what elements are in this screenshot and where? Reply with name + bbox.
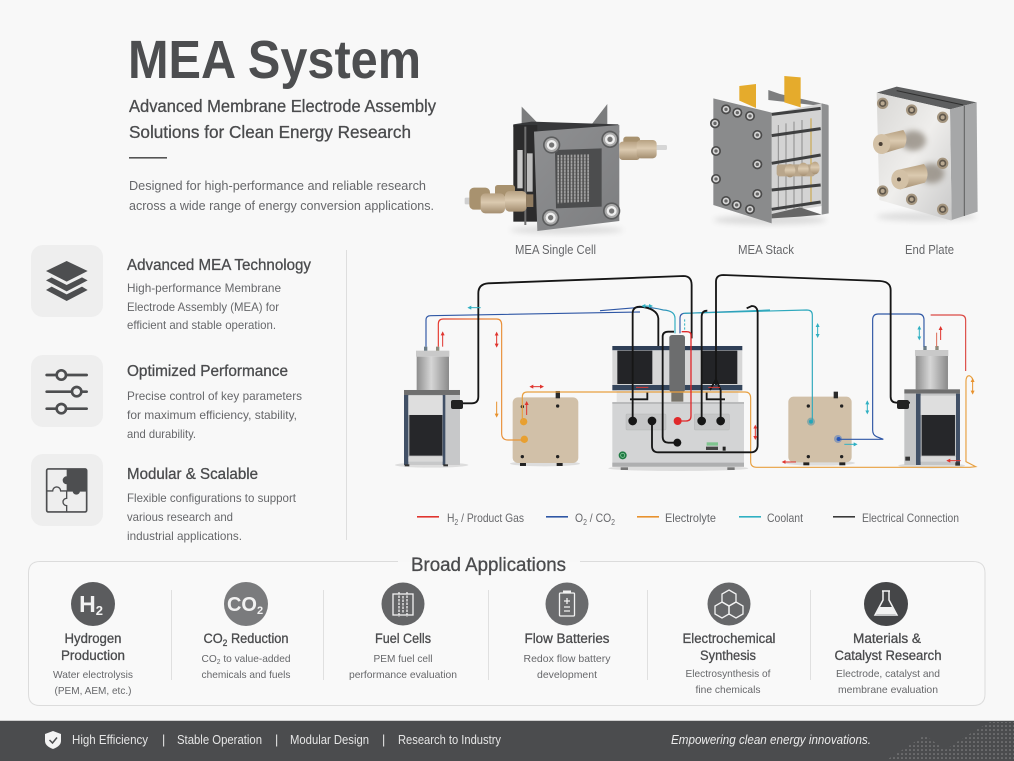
application: hydrogen production bbox=[53, 582, 133, 697]
application: CO2 reduction bbox=[202, 582, 291, 681]
feature: Optimized Performance: for maximum efficiency, stability, bbox=[127, 408, 297, 422]
label: End Plate: End Plate bbox=[905, 243, 954, 257]
title: MEA System bbox=[128, 30, 421, 90]
gas piping bbox=[426, 307, 966, 439]
legend: 2 bbox=[454, 518, 459, 527]
application: fuel cells: performance evaluation bbox=[349, 669, 457, 681]
legend: H bbox=[447, 511, 456, 525]
intro text: Designed for high-performance and reliable research bbox=[129, 178, 426, 193]
application: flow batteries: Redox flow battery bbox=[524, 653, 611, 665]
application: flow batteries: development bbox=[537, 669, 597, 681]
legend: / CO bbox=[587, 511, 611, 525]
feature: Optimized Performance: and durability. bbox=[127, 427, 196, 441]
application: CO2 reduction: Reduction bbox=[227, 631, 288, 646]
application: fuel cells bbox=[349, 582, 457, 681]
feature: Advanced MEA Technology: Advanced MEA Technology bbox=[127, 257, 311, 274]
icon: sliders bbox=[31, 355, 103, 427]
footer features: Stable Operation bbox=[177, 733, 262, 747]
subtitle bbox=[129, 96, 436, 142]
red gas line to stack bbox=[678, 332, 691, 421]
application: CO2 reduction: 2 bbox=[223, 638, 227, 648]
electrolyte piping bbox=[438, 319, 976, 467]
application: hydrogen production: 2 bbox=[96, 603, 103, 618]
feature: Advanced MEA Technology bbox=[31, 245, 311, 332]
legend: Coolant bbox=[767, 511, 804, 525]
feature: Modular & Scalable: various research and bbox=[127, 510, 233, 524]
right chiller unit bbox=[898, 346, 965, 468]
application: electrochemical synthesis bbox=[682, 582, 776, 696]
left chiller unit bbox=[395, 347, 468, 468]
application: electrochemical synthesis: Synthesis bbox=[700, 648, 756, 663]
legend: Electrolyte bbox=[665, 511, 716, 525]
left electrolyte tank bbox=[510, 391, 580, 466]
icon: shield bbox=[45, 731, 61, 749]
feature: Advanced MEA Technology: Electrode Assembly (MEA) for bbox=[127, 300, 279, 314]
footer features: | bbox=[382, 733, 385, 747]
application: CO2 reduction: CO bbox=[204, 631, 224, 646]
footer bar bbox=[0, 720, 1014, 761]
product: MEA stack bbox=[710, 76, 829, 257]
label: MEA Stack: MEA Stack bbox=[738, 243, 795, 257]
product: end plate bbox=[873, 87, 978, 257]
legend: 2 bbox=[611, 518, 615, 527]
footer features: | bbox=[275, 733, 278, 747]
application: electrochemical synthesis: fine chemicals bbox=[696, 684, 760, 696]
application: hydrogen production: Production bbox=[61, 648, 125, 663]
footer features bbox=[72, 733, 502, 747]
label: MEA Single Cell: MEA Single Cell bbox=[515, 243, 596, 257]
icon: layers bbox=[31, 245, 103, 317]
application: materials and catalyst research: membrane evaluation bbox=[838, 684, 938, 696]
flow arrows bbox=[443, 306, 973, 462]
feature: Modular & Scalable: Flexible configurations to support bbox=[127, 491, 297, 505]
application: CO2 reduction: 2 bbox=[217, 659, 221, 666]
application: flow batteries: Flow Batteries bbox=[524, 631, 610, 646]
station ports bbox=[628, 417, 725, 447]
intro text: across a wide range of energy conversion applications. bbox=[129, 198, 434, 213]
product: MEA single cell bbox=[465, 104, 667, 257]
footer features: | bbox=[162, 733, 165, 747]
feature: Advanced MEA Technology: High-performance Membrane bbox=[127, 281, 281, 295]
application: CO2 reduction: to value-added bbox=[221, 653, 291, 665]
heading: Broad Applications: Broad Applications bbox=[411, 555, 566, 576]
feature: Modular & Scalable bbox=[31, 454, 297, 543]
right electrolyte tank bbox=[785, 392, 855, 466]
application: electrochemical synthesis: Electrochemical bbox=[682, 631, 776, 646]
application: materials and catalyst research bbox=[834, 582, 942, 696]
application: CO2 reduction: 2 bbox=[257, 605, 263, 617]
central test station bbox=[608, 335, 748, 471]
application: fuel cells: PEM fuel cell bbox=[374, 653, 432, 665]
application: materials and catalyst research: Materials & bbox=[853, 631, 921, 646]
application: hydrogen production: Hydrogen bbox=[64, 631, 122, 646]
application: CO2 reduction: CO bbox=[202, 653, 217, 665]
application: materials and catalyst research: Electrode, catalyst and bbox=[836, 668, 940, 680]
application: electrochemical synthesis: Electrosynthesis of bbox=[686, 668, 771, 680]
application: materials and catalyst research: Catalyst Research bbox=[834, 648, 942, 663]
application: CO2 reduction: chemicals and fuels bbox=[202, 669, 290, 681]
feature: Modular & Scalable: Modular & Scalable bbox=[127, 466, 258, 483]
tagline: Empowering clean energy innovations. bbox=[671, 733, 871, 747]
footer features: Research to Industry bbox=[398, 733, 502, 747]
legend: Electrical Connection bbox=[862, 511, 959, 525]
footer features: High Efficiency bbox=[72, 733, 149, 747]
application: hydrogen production: Water electrolysis bbox=[53, 669, 133, 681]
feature: Advanced MEA Technology: efficient and stable operation. bbox=[127, 318, 276, 332]
application: CO2 reduction: CO bbox=[227, 594, 257, 616]
application: hydrogen production: (PEM, AEM, etc.) bbox=[54, 685, 132, 697]
panel: broad applications bbox=[28, 555, 985, 706]
footer features: Modular Design bbox=[290, 733, 369, 747]
feature: Optimized Performance bbox=[31, 355, 302, 441]
application: fuel cells: Fuel Cells bbox=[375, 631, 431, 646]
dotted wave decoration bbox=[885, 722, 1014, 761]
icon: puzzle bbox=[31, 454, 103, 526]
feature: Optimized Performance: Precise control of key parameters bbox=[127, 389, 302, 403]
application: flow batteries bbox=[524, 582, 611, 681]
legend: 2 bbox=[583, 518, 587, 527]
electrical wiring bbox=[455, 275, 910, 452]
chiller power connectors bbox=[451, 400, 909, 409]
feature: Modular & Scalable: industrial applications. bbox=[127, 529, 242, 543]
subtitle: Advanced Membrane Electrode Assembly bbox=[129, 96, 436, 116]
application: hydrogen production: H bbox=[79, 591, 96, 617]
subtitle: Solutions for Clean Energy Research bbox=[129, 122, 411, 142]
intro text bbox=[129, 178, 434, 213]
legend bbox=[417, 511, 959, 527]
legend: / Product Gas bbox=[458, 511, 524, 525]
feature: Optimized Performance: Optimized Performance bbox=[127, 363, 288, 380]
legend: O bbox=[575, 511, 584, 525]
